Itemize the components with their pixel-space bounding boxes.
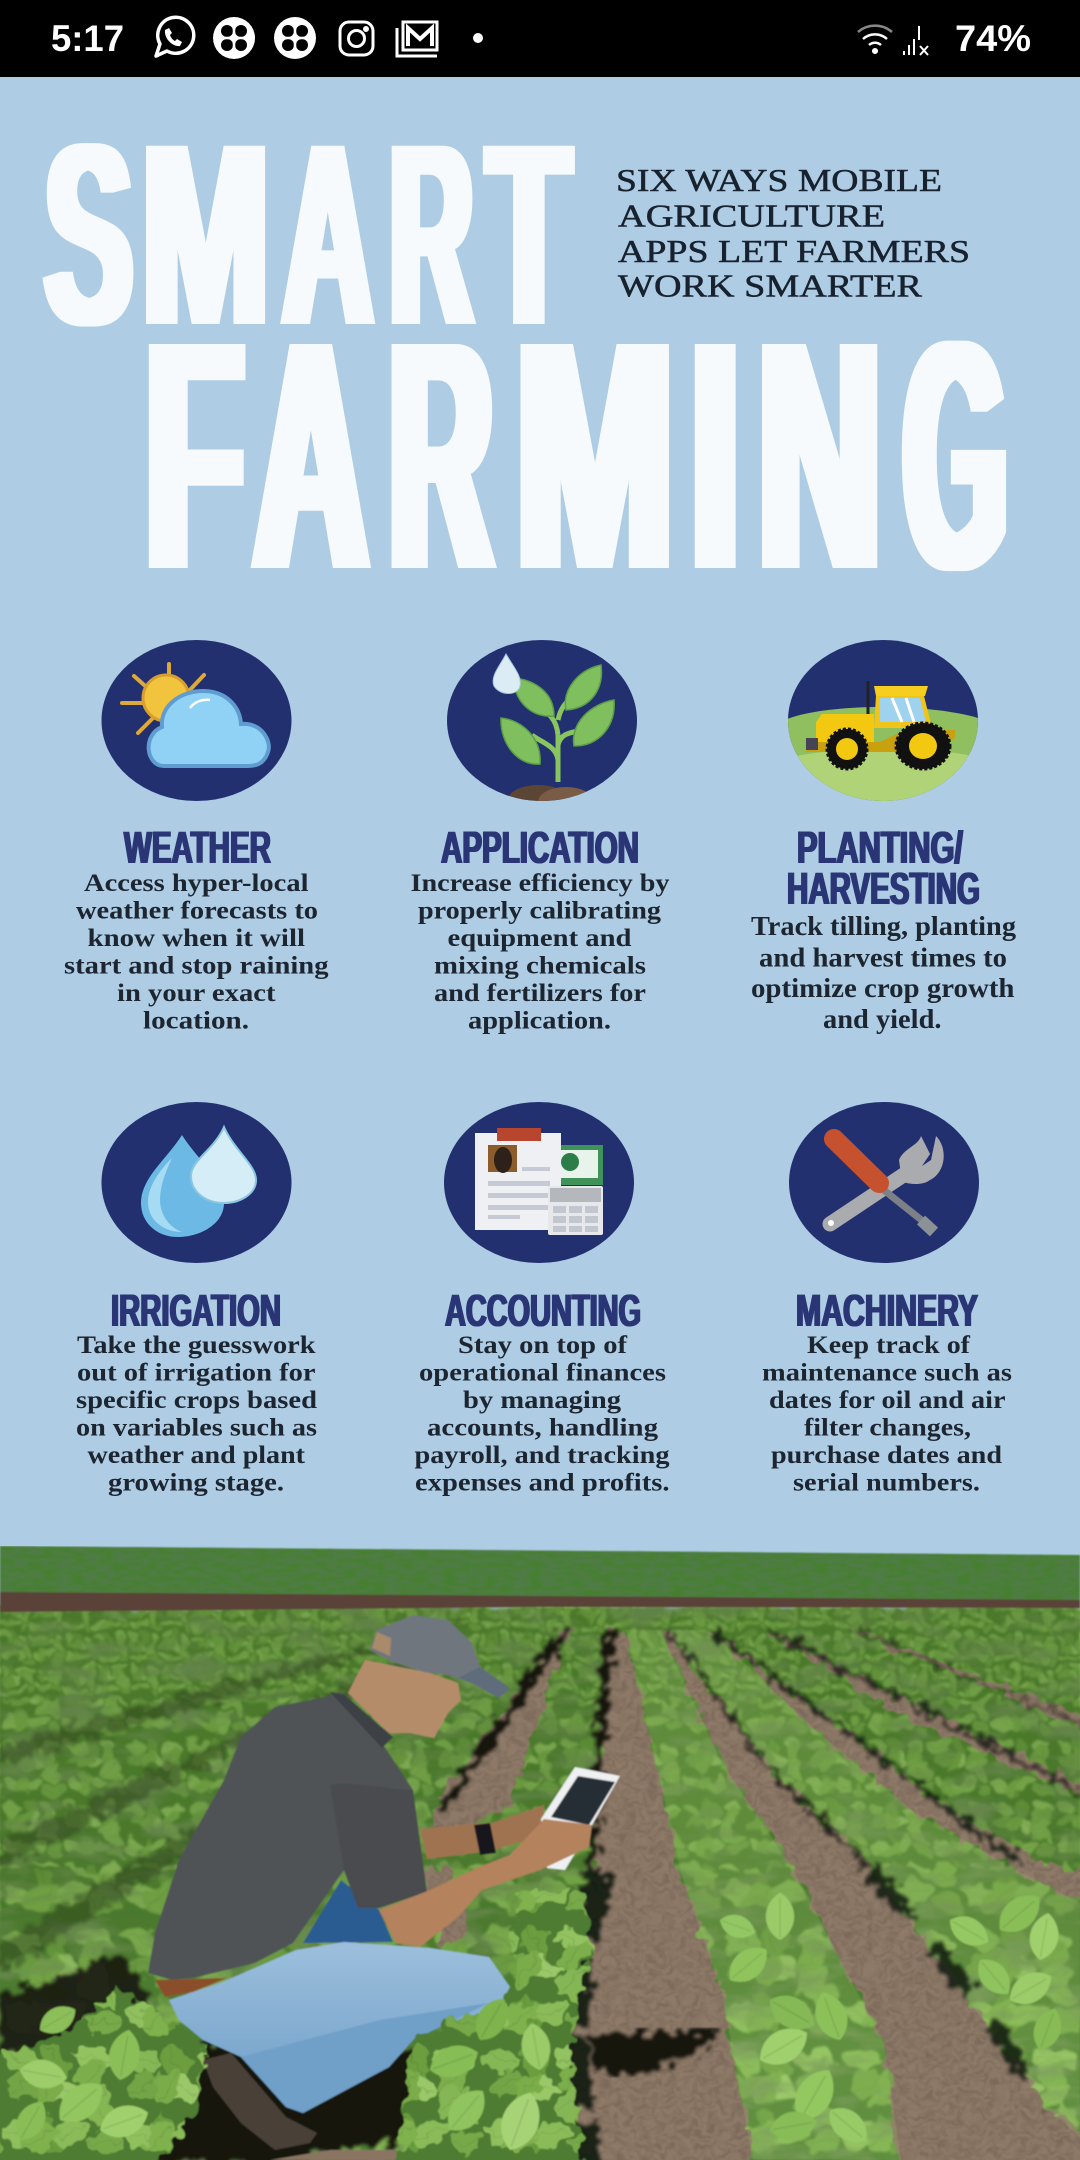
heading: PLANTING/ xyxy=(797,822,963,873)
ground shadow blob xyxy=(590,2030,722,2075)
man: jeans behind shirt xyxy=(303,1880,393,1943)
description: accounts, handling xyxy=(427,1412,658,1442)
status bar xyxy=(0,0,1080,77)
title line: farming: I xyxy=(691,273,739,637)
subtitle: SIX WAYS MOBILE xyxy=(616,162,942,198)
man: boot xyxy=(203,2053,317,2150)
title line: farming: N xyxy=(759,273,881,637)
panel: accounting xyxy=(414,1102,670,1496)
title xyxy=(45,90,1006,637)
description: by managing xyxy=(463,1385,621,1414)
icon: wifi xyxy=(858,26,892,53)
description: start and stop raining xyxy=(64,950,329,980)
description: filter changes, xyxy=(804,1412,971,1442)
heading: APPLICATION xyxy=(441,822,639,873)
description: weather forecasts to xyxy=(76,896,318,924)
man: tablet xyxy=(541,1767,620,1870)
title line: farming: R xyxy=(390,273,492,637)
field darkening xyxy=(0,1608,1080,2048)
man: neck and face xyxy=(348,1660,461,1738)
title line: farming: M xyxy=(516,273,674,637)
ground shadow under farmer xyxy=(0,1955,420,2160)
title line: farming: A xyxy=(255,273,367,637)
foreground leaves xyxy=(9,1886,1067,2156)
description: specific crops based xyxy=(76,1385,317,1414)
icon: clover app one xyxy=(213,17,255,59)
heading: HARVESTING xyxy=(787,863,980,914)
description: Access hyper-local xyxy=(84,868,308,897)
description: maintenance such as xyxy=(762,1358,1012,1386)
panel: machinery xyxy=(762,1102,1012,1496)
re-cover dirt track edge xyxy=(0,1600,1080,1612)
icon: sun and cloud xyxy=(102,640,292,801)
title line: smart: M xyxy=(142,90,269,379)
man: cap xyxy=(370,1615,510,1698)
subtitle xyxy=(616,162,970,304)
man: shirt xyxy=(148,1692,427,1980)
title line: smart: S xyxy=(45,90,133,379)
description: Track tilling, planting xyxy=(751,910,1016,941)
description: and yield. xyxy=(823,1003,942,1034)
far field strip xyxy=(0,1546,1080,1602)
furrow shadows xyxy=(440,1630,1080,2160)
dirt track xyxy=(0,1592,1080,1609)
description: optimize crop growth xyxy=(751,972,1014,1003)
man: near arm and hand xyxy=(379,1819,592,1947)
description xyxy=(414,1330,670,1496)
panel: irrigation xyxy=(76,1102,317,1496)
icon: plant xyxy=(447,640,637,817)
man: watch xyxy=(474,1823,496,1855)
description xyxy=(751,910,1016,1034)
clock: 5:17 xyxy=(51,18,124,59)
heading: WEATHER xyxy=(124,822,271,873)
description: Increase efficiency by xyxy=(410,868,670,897)
battery percent: 74% xyxy=(955,18,1031,59)
description: Stay on top of xyxy=(458,1330,628,1359)
description: and fertilizers for xyxy=(434,978,646,1007)
title line: smart: R xyxy=(390,90,473,379)
left field row shadows xyxy=(0,1620,470,1975)
man: belt xyxy=(155,1978,227,1997)
subtitle: APPS LET FARMERS xyxy=(618,233,970,269)
icon: tractor xyxy=(788,640,978,801)
title line: smart: A xyxy=(283,90,373,379)
description xyxy=(762,1330,1012,1496)
icon: whatsapp xyxy=(156,17,194,56)
notification dot xyxy=(473,33,483,43)
subtitle: WORK SMARTER xyxy=(618,268,923,304)
heading: MACHINERY xyxy=(796,1285,978,1336)
description xyxy=(64,868,329,1034)
heading: IRRIGATION xyxy=(111,1285,281,1336)
icon: mail xyxy=(397,22,437,56)
description: expenses and profits. xyxy=(415,1468,670,1496)
description: growing stage. xyxy=(108,1468,284,1496)
description: purchase dates and xyxy=(771,1440,1002,1469)
subtitle: AGRICULTURE xyxy=(618,198,885,234)
panel: weather xyxy=(64,640,329,1034)
description: mixing chemicals xyxy=(434,950,646,980)
description: in your exact xyxy=(117,978,276,1007)
heading: ACCOUNTING xyxy=(445,1285,641,1336)
icon: water drops xyxy=(102,1102,292,1263)
description: equipment and xyxy=(448,923,632,952)
man: jeans xyxy=(169,1942,510,2113)
description: out of irrigation for xyxy=(77,1358,316,1386)
description: serial numbers. xyxy=(793,1468,980,1496)
icon: instagram xyxy=(340,22,373,55)
description: properly calibrating xyxy=(418,896,661,924)
man: far forearm and hand xyxy=(420,1805,544,1859)
description: Keep track of xyxy=(807,1330,971,1359)
icon: clover app two xyxy=(274,17,316,59)
description: and harvest times to xyxy=(759,942,1007,972)
description: operational finances xyxy=(419,1358,666,1386)
crop field xyxy=(0,1603,1080,2160)
soil furrows xyxy=(424,1628,1080,2160)
description: weather and plant xyxy=(88,1440,306,1469)
description xyxy=(410,868,670,1034)
foreground crop row, left xyxy=(0,1987,207,2160)
heading xyxy=(787,822,980,914)
panel: planting and harvesting xyxy=(751,640,1016,1034)
sunlit soil under boot xyxy=(270,2150,410,2160)
icon: signal xyxy=(904,26,928,55)
description: location. xyxy=(143,1006,249,1034)
description: application. xyxy=(468,1006,611,1034)
description: dates for oil and air xyxy=(769,1385,1006,1414)
title line: farming: F xyxy=(146,273,243,637)
bright near crop rows xyxy=(626,1630,1080,2160)
description xyxy=(76,1330,317,1496)
title line: smart: T xyxy=(487,90,570,379)
description: know when it will xyxy=(88,923,305,952)
description: Take the guesswork xyxy=(77,1330,316,1359)
foreground crop row, centre xyxy=(395,1890,590,2160)
panel: application xyxy=(410,640,670,1034)
description: payroll, and tracking xyxy=(414,1440,670,1469)
icon: clipboard, money and calculator xyxy=(444,1102,634,1263)
description: on variables such as xyxy=(76,1412,317,1442)
photo: farmer with tablet in a soybean field xyxy=(0,1546,1080,2160)
icon: wrench and screwdriver xyxy=(789,1102,979,1263)
